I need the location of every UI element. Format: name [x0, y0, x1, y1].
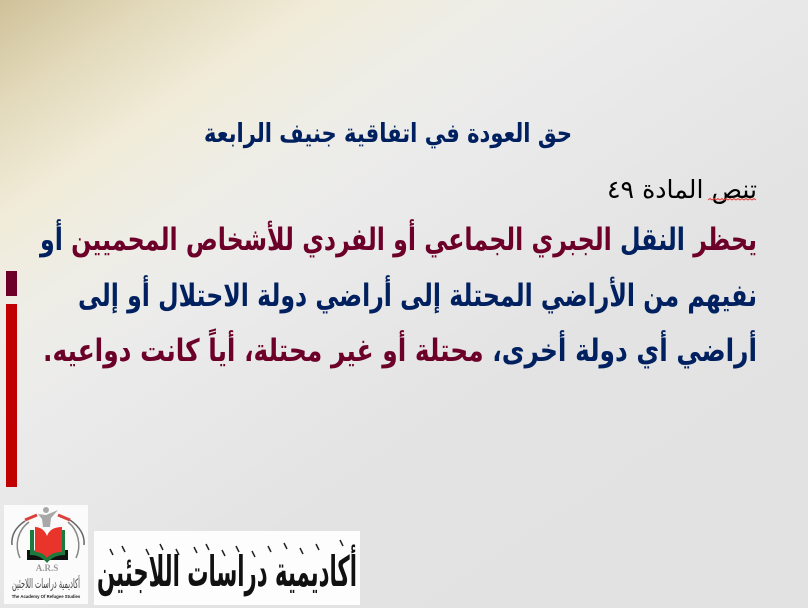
- title: حق العودة في اتفاقية جنيف الرابعة: [204, 119, 572, 149]
- icon: open book: [27, 527, 68, 563]
- logo: academy emblem: [4, 505, 88, 604]
- subtitle: article 49: تنص المادة ٤٩: [607, 175, 757, 204]
- body line 3: أراضي أي دولة أخرى، محتلة أو غير محتلة، أياً كانت دواعيه.: [43, 328, 757, 369]
- body text: [38, 219, 757, 369]
- accent bar: red: [6, 304, 17, 487]
- calligraphy banner: أكاديمية دراسات اللاجئين: [97, 544, 357, 597]
- logo initials: A.R.S: [36, 563, 58, 573]
- logo arabic name: أكاديمية دراسات اللاجئين: [12, 575, 80, 592]
- icon: figure above book: [38, 507, 58, 527]
- logo english name: The Academy Of Refugee Studies: [12, 594, 81, 599]
- accent bar: maroon: [6, 271, 17, 296]
- icon: outer arcs: [12, 515, 84, 558]
- calligraphy banner: [94, 531, 360, 605]
- body line 1: يحظر النقل الجبري الجماعي أو الفردي للأشخاص المحميين أو: [38, 219, 757, 258]
